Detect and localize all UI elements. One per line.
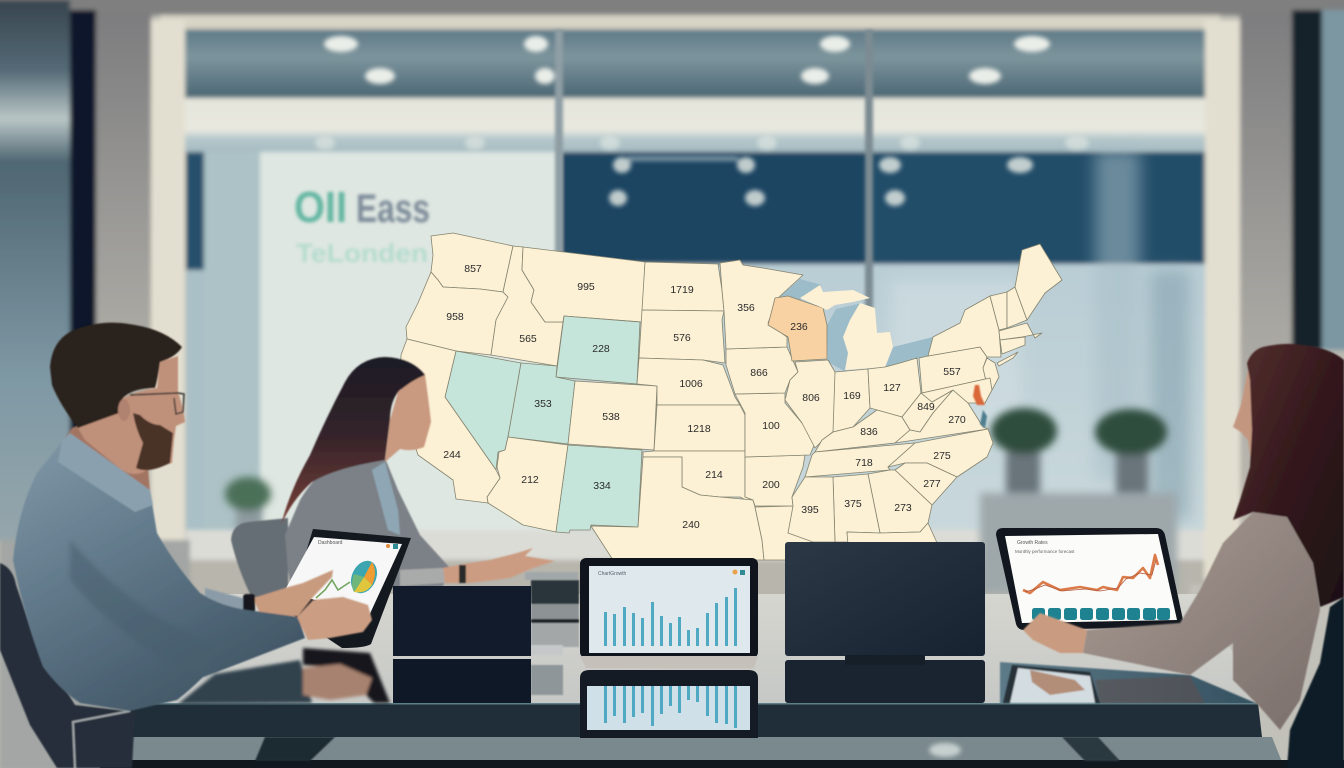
shirt xyxy=(13,442,305,711)
man's chair xyxy=(0,563,135,768)
state values: 169 xyxy=(843,390,861,402)
state values: 995 xyxy=(577,281,595,293)
state values: 1006 xyxy=(679,378,703,390)
state values: 718 xyxy=(855,457,873,469)
state values: 1719 xyxy=(670,284,694,296)
state values: 806 xyxy=(802,392,820,404)
hand and shirt reflection on table xyxy=(178,648,390,704)
screen subtitle: Monthly performance forecast xyxy=(1015,549,1075,554)
table glass reflection right xyxy=(1000,662,1258,704)
dark closed tablet xyxy=(393,586,531,656)
left tablet: pie chart xyxy=(285,529,411,648)
state values: 958 xyxy=(446,311,464,323)
inner shirt xyxy=(372,462,400,535)
right tablet reflection xyxy=(1003,665,1205,703)
lakes xyxy=(776,279,941,372)
state values: 228 xyxy=(592,343,610,355)
states xyxy=(400,233,1062,560)
blurred wall logo text: Eass xyxy=(356,187,430,231)
state values: 849 xyxy=(917,401,935,413)
state values: 334 xyxy=(593,480,611,492)
center woman xyxy=(231,357,555,605)
glasses xyxy=(130,393,184,414)
screen title: Growth Rates xyxy=(1017,540,1048,546)
background plants and cabinet xyxy=(225,408,1177,593)
state values: 277 xyxy=(923,478,941,490)
sweater xyxy=(1083,512,1320,730)
right woman xyxy=(1023,344,1344,768)
state values: 270 xyxy=(948,414,966,426)
state values: 565 xyxy=(519,333,537,345)
US choropleth map xyxy=(400,233,1062,560)
state values: 576 xyxy=(673,332,691,344)
face xyxy=(385,375,431,462)
blurred wall logo text xyxy=(294,183,430,268)
state values: 353 xyxy=(534,398,552,410)
screen title: Dashboard xyxy=(318,540,343,546)
state values: 240 xyxy=(682,519,700,531)
dashboard icons xyxy=(732,570,745,575)
front hand xyxy=(297,597,372,640)
face xyxy=(1233,362,1262,468)
blurred wall logo text: TeLonden xyxy=(296,238,428,268)
pie xyxy=(346,557,382,597)
state values: 100 xyxy=(762,420,780,432)
back forearm and pointing hand xyxy=(253,570,333,618)
state values: 375 xyxy=(844,498,862,510)
state values xyxy=(443,263,966,531)
state values: 866 xyxy=(750,367,768,379)
state values: 356 xyxy=(737,302,755,314)
center tablet reflection xyxy=(580,670,758,738)
state values: 127 xyxy=(883,382,901,394)
sleeve and hand xyxy=(400,548,555,586)
lower shelf xyxy=(100,737,1282,762)
table edge xyxy=(130,703,1262,737)
sleeve shadow xyxy=(70,540,217,677)
orange trend line xyxy=(1023,555,1158,593)
hair xyxy=(281,357,425,525)
blurred wall logo text: OII xyxy=(294,183,347,232)
watch xyxy=(243,594,255,620)
center tablet: bar chart xyxy=(580,558,758,668)
state values: 200 xyxy=(762,479,780,491)
state values: 275 xyxy=(933,450,951,462)
bars xyxy=(604,588,737,646)
jacket xyxy=(285,458,450,605)
glass panel highlights xyxy=(890,150,1190,520)
screen icons xyxy=(386,544,398,549)
state values: 244 xyxy=(443,449,461,461)
chair xyxy=(231,518,288,598)
window mullions xyxy=(555,30,873,510)
beard xyxy=(133,413,173,470)
hair xyxy=(1233,344,1344,607)
state values: 836 xyxy=(860,426,878,438)
line chart xyxy=(316,580,350,598)
state values: 1218 xyxy=(687,423,711,435)
hand xyxy=(1023,613,1087,653)
Chesapeake detail xyxy=(973,385,987,428)
desk stack of devices behind tablet xyxy=(525,572,579,695)
state values: 273 xyxy=(894,502,912,514)
hair xyxy=(50,323,182,428)
reflection of dark tablets on table xyxy=(393,659,985,703)
right tablet: line chart xyxy=(996,528,1183,634)
state values: 538 xyxy=(602,411,620,423)
dashboard title: ChartGrowth xyxy=(598,571,627,577)
ceiling and panel lights xyxy=(315,36,1089,206)
face xyxy=(78,356,185,474)
chair xyxy=(1287,597,1344,768)
state values: 857 xyxy=(464,263,482,275)
state values: 214 xyxy=(705,469,723,481)
ear xyxy=(118,399,130,421)
state values: 236 xyxy=(790,321,808,333)
state values: 557 xyxy=(943,366,961,378)
neck xyxy=(62,405,150,492)
collar xyxy=(58,433,153,512)
state values: 212 xyxy=(521,474,539,486)
table surface xyxy=(100,594,1344,768)
state values: 395 xyxy=(801,504,819,516)
large laptop back xyxy=(785,542,985,665)
teal buttons xyxy=(1032,608,1170,620)
man xyxy=(13,323,372,711)
